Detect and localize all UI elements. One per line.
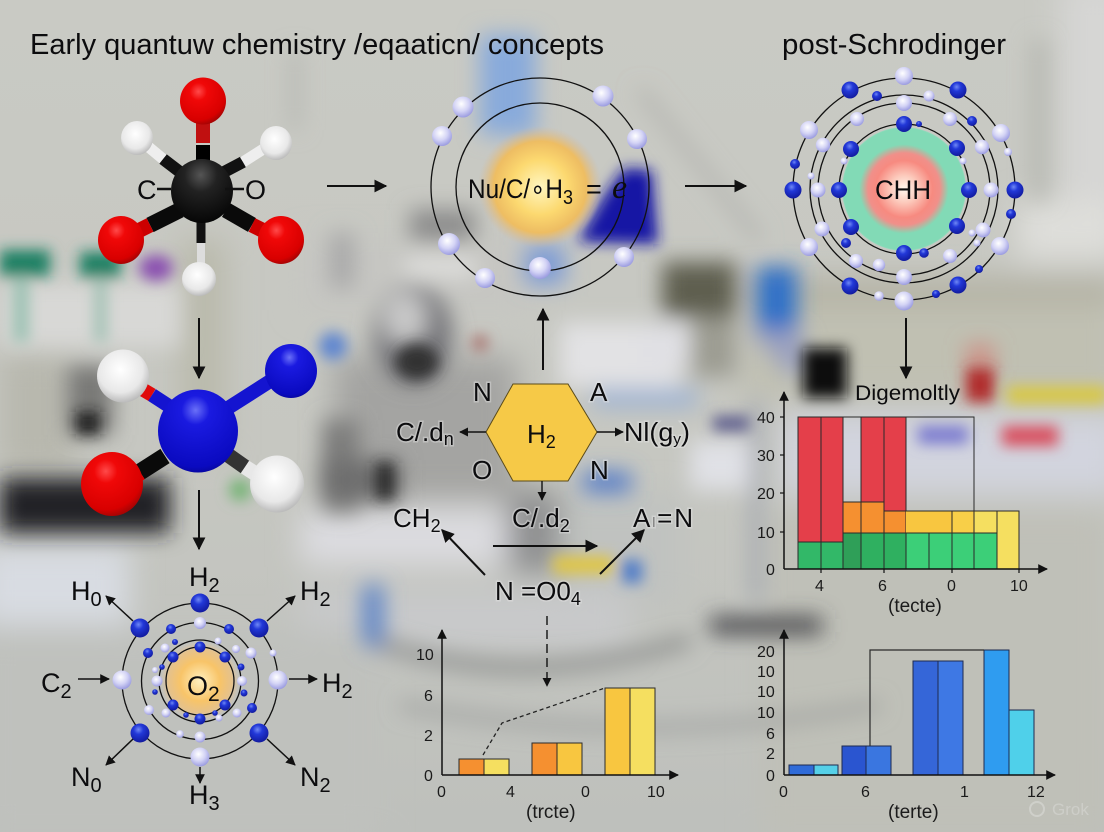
label: H0: H	[71, 576, 90, 606]
molecule: blue centre with red and white atoms	[81, 344, 317, 516]
chart: orange-yellow bars: 4	[506, 784, 515, 801]
chart: blue bars: 12	[1027, 784, 1045, 801]
arrow: central atom to post-Schrodinger atom	[685, 185, 746, 187]
label: O: O	[245, 175, 266, 205]
chart: Digemoltly stacked bars: 40	[757, 410, 775, 427]
label: A=N: Al=N	[633, 503, 693, 533]
chart: blue bars	[757, 630, 1055, 823]
label: H2 top: H	[189, 562, 208, 592]
arrow: molecule 1 to molecule 2	[198, 318, 200, 378]
label: C/.dn: n	[444, 429, 454, 449]
label: H2 upper right: 2	[320, 589, 331, 611]
label: H2 right: 2	[342, 681, 353, 703]
title: post-Schrodinger: post-Schrodinger	[782, 29, 1007, 61]
molecule: black carbon centre with red and white atoms	[98, 78, 304, 296]
chart: Digemoltly stacked bars: 6	[878, 578, 887, 595]
label: H0: 0	[90, 589, 102, 611]
label: N upper left: N	[473, 377, 492, 407]
label: O2 centre: O	[187, 671, 208, 701]
chart: blue bars: 0	[766, 768, 775, 785]
chart: Digemoltly stacked bars: 30	[757, 448, 775, 465]
chart: blue bars: 0	[779, 784, 788, 801]
equals sign: =	[586, 174, 602, 204]
label: N|(gy): )	[681, 417, 690, 447]
label: C2: 2	[60, 681, 72, 703]
chart: blue bars: (terte)	[888, 802, 939, 823]
label: H2 in hexagon: H	[527, 419, 546, 449]
label: C2: C	[41, 668, 60, 698]
atom diagram: central equation atom	[431, 78, 649, 296]
arrow: molecule 2 to atom	[198, 490, 200, 549]
label: C/.dn: C/.d	[396, 417, 444, 447]
label: H3: H	[189, 780, 208, 810]
chart: blue bars: 6	[766, 726, 775, 743]
label: O2 centre: 2	[208, 683, 220, 706]
label: C/.d2: C/.d	[512, 503, 560, 533]
chart: Digemoltly stacked bars: 20	[757, 486, 775, 503]
chart: blue bars: 6	[861, 784, 870, 801]
chart title: Digemoltly	[855, 382, 961, 405]
label: N=O04: N =O0	[495, 576, 571, 606]
chart: Digemoltly stacked bars: 4	[815, 578, 824, 595]
label: O: O	[472, 455, 492, 485]
chart: blue bars: 1	[960, 784, 969, 801]
label: H3: 3	[208, 793, 220, 815]
chart: blue bars: 10	[757, 664, 775, 681]
label: CH2: CH	[393, 503, 431, 533]
chart: orange-yellow bars: 6	[424, 688, 433, 705]
chart: Digemoltly stacked bars: (tecte)	[888, 596, 942, 617]
atom diagram: post-Schrodinger CHH	[784, 67, 1024, 310]
chart: blue bars: 10	[757, 684, 775, 701]
letter e: e	[612, 169, 627, 206]
chart: Digemoltly stacked bars: 0	[766, 562, 775, 579]
label: N|(gy): Nl(g	[624, 417, 672, 447]
watermark: Grok	[1052, 800, 1089, 819]
label: H2 in hexagon: 2	[546, 432, 556, 452]
chart: orange-yellow bars: 0	[424, 768, 433, 785]
watermark	[1030, 800, 1089, 819]
atom diagram: O2 core with outward labels	[41, 562, 353, 815]
chart: blue bars: 20	[757, 644, 775, 661]
label: N=O04: 4	[571, 589, 581, 609]
chart: Digemoltly stacked bars: 10	[757, 525, 775, 542]
label: H2 right: H	[322, 668, 342, 698]
label: N0: N	[71, 762, 90, 792]
label: N|(gy): y	[673, 431, 682, 448]
hexagon: H2 with surrounding labels	[396, 377, 690, 500]
label: H2 top: 2	[208, 575, 220, 597]
label: N2: 2	[320, 775, 331, 797]
reaction scheme: N=O04	[393, 503, 693, 609]
label: CHH: CHH	[875, 175, 931, 205]
equation text: Nu/C/∘H	[468, 174, 573, 204]
label: N lower right: N	[590, 455, 609, 485]
chart: orange-yellow bars: 0	[581, 784, 590, 801]
label: C/.d2: 2	[560, 516, 570, 536]
equation text: 3	[563, 187, 573, 209]
label: CH2: 2	[431, 516, 441, 536]
label: H2 upper right: H	[300, 576, 320, 606]
chart: orange-yellow bars	[416, 630, 678, 823]
chart: Digemoltly stacked bars: 10	[1010, 578, 1028, 595]
chart: orange-yellow bars: (trcte)	[526, 802, 576, 823]
chart: orange-yellow bars: 2	[424, 728, 433, 745]
chart: Digemoltly stacked bars: 0	[947, 578, 956, 595]
label: A: A	[590, 377, 608, 407]
arrow: hexagon to central atom	[542, 309, 544, 370]
arrow: CHH atom to bar chart	[905, 318, 907, 378]
chart: orange-yellow bars: 10	[416, 647, 434, 664]
chart: blue bars: 10	[757, 705, 775, 722]
arrow: molecule to central atom	[327, 185, 386, 187]
chart: Digemoltly stacked bars	[757, 382, 1047, 617]
dashed arrow from reaction to chart	[546, 616, 548, 686]
chart: orange-yellow bars: 10	[647, 784, 665, 801]
chart: blue bars: 2	[766, 746, 775, 763]
chart: orange-yellow bars: 0	[437, 784, 446, 801]
title: early quantum chemistry: Early quantuw chemistry /eqaaticn/ concepts	[30, 29, 604, 61]
label: N0: 0	[90, 775, 102, 797]
label: N2: N	[300, 762, 320, 792]
label: C: C	[137, 175, 156, 205]
